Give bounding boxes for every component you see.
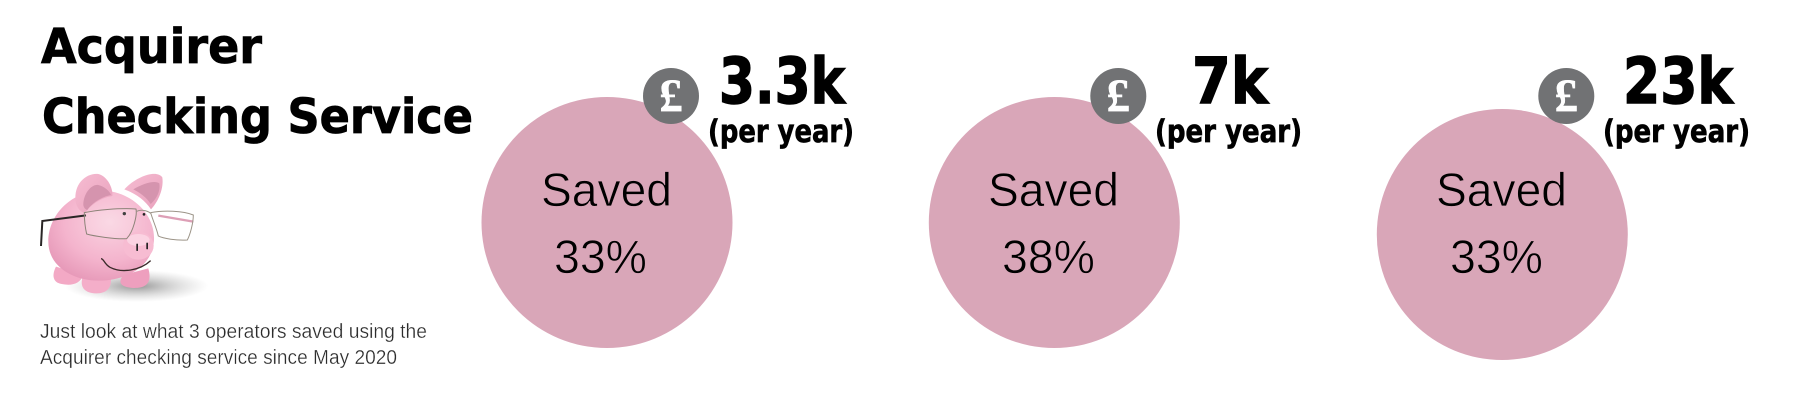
circle: saved 38%: 38% [1002,230,1095,283]
amount: 3.3k per year: (per year) [708,114,854,150]
title: Acquirer [41,19,262,75]
circle: saved 33%: Saved [541,163,672,216]
amount: 7k per year: 7k [1192,45,1270,118]
amount: 7k per year [1155,45,1302,150]
description text: Just look at what 3 operators saved using the [40,321,427,343]
amount: 23k per year: (per year) [1603,114,1750,150]
snout [123,232,154,260]
circle: saved 38% [929,97,1180,348]
panel: operator 2 [929,45,1302,348]
circle: saved 33% [482,97,732,348]
circle: saved 33% [1377,109,1628,360]
amount: 23k per year [1603,45,1750,150]
icon: pound badge: £ [1107,70,1130,122]
icon: piggy bank with glasses [41,174,208,302]
right ear [124,174,163,209]
amount: 23k per year: 23k [1623,45,1735,118]
icon: pound badge [1538,68,1594,124]
circle: saved 33%: 33% [1450,230,1543,283]
icon: pound badge: £ [1555,70,1578,122]
circle: saved 33%: 33% [554,230,647,283]
circle: saved 38%: Saved [988,163,1119,216]
panel: operator 3 [1377,45,1750,360]
left ear [75,174,112,213]
title: Checking Service [42,89,473,145]
icon: pound badge [643,68,699,124]
title [41,19,473,145]
icon: pound badge [1090,68,1146,124]
amount: 7k per year: (per year) [1155,114,1302,150]
description text: Acquirer checking service since May 2020 [40,347,397,369]
icon: pound badge: £ [659,70,683,122]
amount: 3.3k per year: 3.3k [719,45,847,118]
panel: operator 1 [482,45,854,348]
glasses [41,215,86,246]
amount: 3.3k per year [708,45,854,150]
description text [40,321,427,369]
circle: saved 33%: Saved [1436,163,1567,216]
